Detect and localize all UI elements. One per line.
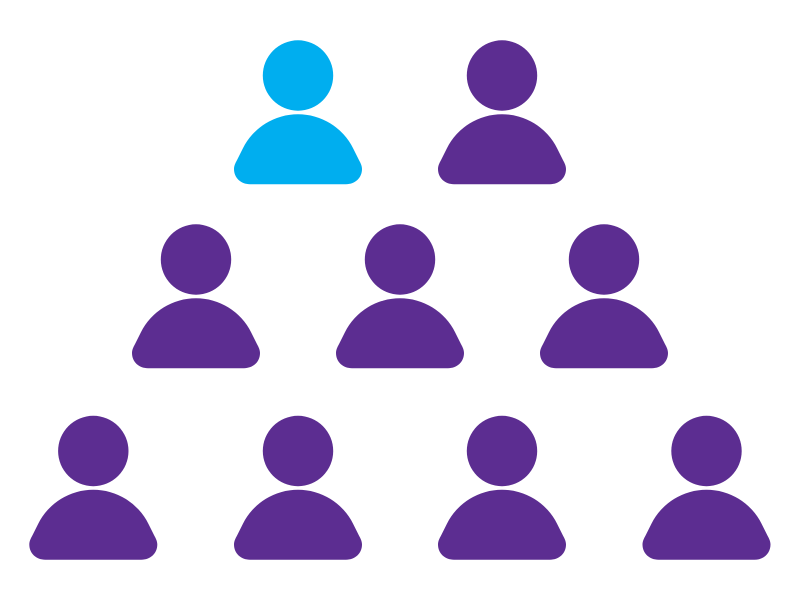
icon: person row 2 column 3 (540, 224, 668, 368)
icon: person row 1 column 1 (highlighted blue) (234, 40, 362, 184)
icon: person row 2 column 1 (132, 224, 260, 368)
icon: person row 1 column 2 (438, 40, 566, 184)
icon: person row 3 column 2 (234, 416, 362, 560)
icon: person row 2 column 2 (336, 224, 464, 368)
icon: person row 3 column 1 (29, 416, 157, 560)
icon: person row 3 column 3 (438, 416, 566, 560)
icon: person row 3 column 4 (642, 416, 770, 560)
